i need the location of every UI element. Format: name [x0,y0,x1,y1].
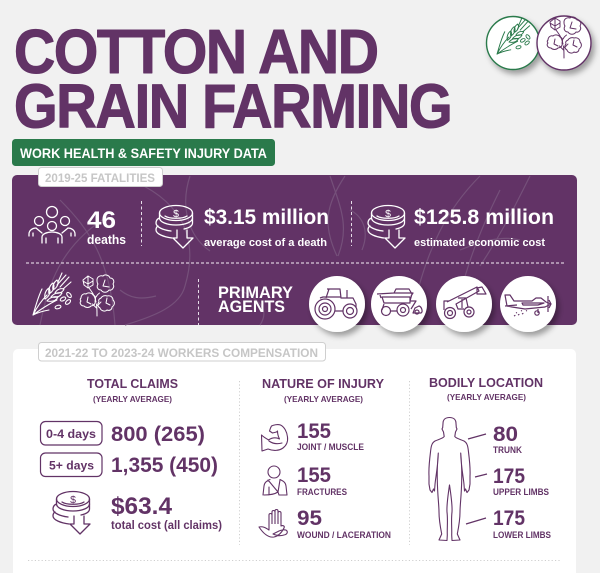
stat: deaths [87,207,126,247]
stat: total cost [111,493,222,532]
badge: 0-4 days: 0-4 days [46,427,96,441]
title: GRAIN FARMING [14,71,451,141]
section tag: 2019-25 FATALITIES [45,173,155,185]
stat: trunk: TRUNK [493,445,522,455]
stat: economic cost: estimated economic cost [414,237,545,249]
icon: person with sling [263,466,287,495]
stat: lower limbs: 175 [493,507,525,530]
badge: 5+ days: 5+ days [49,458,94,472]
icon: coins with down arrow [368,206,405,248]
column: nature of injury [259,377,391,540]
stat: average cost [204,206,329,249]
icon: body outline [429,418,470,540]
stat: lower limbs: LOWER LIMBS [493,530,551,540]
stat: deaths: deaths [87,233,126,247]
icon: telehandler badge [436,276,492,332]
icon: coins with down arrow [53,492,90,534]
stat: fractures: FRACTURES [297,487,347,497]
stat: economic cost: $125.8 million [414,206,554,229]
subtitle banner [12,139,275,166]
subtitle banner: WORK HEALTH & SAFETY INJURY DATA [20,146,267,161]
heading: total claims: TOTAL CLAIMS [87,377,178,391]
heading: nature of injury: NATURE OF INJURY [262,377,385,391]
heading: primary agents: PRIMARY [218,283,294,302]
section tag [38,342,326,361]
decorative plant pattern [40,176,530,325]
icon: wheat badge [486,16,540,70]
panel: fatalities [12,168,577,325]
stat: joint / muscle: JOINT / MUSCLE [297,442,364,452]
stat: fractures [297,464,347,497]
icon: crop duster plane badge [500,276,556,332]
section tag [38,168,162,186]
stat: fractures: 155 [297,464,331,487]
icon: coins with down arrow: $ [173,208,179,220]
column: bodily location [429,376,551,540]
heading: nature of injury: (YEARLY AVERAGE) [284,394,363,404]
stat: total cost: total cost (all claims) [111,520,222,532]
stat: deaths: 46 [87,207,116,234]
icon: wheat [33,273,72,315]
icon: tractor badge [309,276,365,332]
icon: wounded hand [259,510,287,537]
heading: primary agents: AGENTS [218,297,285,316]
heading: total claims [87,377,178,404]
heading: total claims: (YEARLY AVERAGE) [93,394,172,404]
value: 800 (265): 800 (265) [111,423,205,446]
heading: bodily location [429,376,543,402]
stat: upper limbs: UPPER LIMBS [493,487,549,497]
stat: trunk: 80 [493,423,518,446]
badge: 5+ days [40,453,102,476]
stat: economic cost [414,206,554,249]
stat: wound / laceration: 95 [297,507,322,530]
stat: upper limbs: 175 [493,465,525,488]
heading: primary agents [218,283,294,316]
stat: lower limbs [493,507,551,540]
heading: bodily location: BODILY LOCATION [429,376,543,390]
stat: average cost: average cost of a death [204,237,327,249]
stat: trunk [493,423,522,455]
leader lines [466,434,487,524]
icon: cotton [80,275,114,316]
heading: nature of injury [262,377,385,404]
section tag: 2021-22 TO 2023-24 WORKERS COMPENSATION [45,348,318,360]
icon: people [29,206,75,243]
stat: wound / laceration [297,507,391,540]
stat: joint / muscle [297,420,364,452]
icon: coins with down arrow: $ [70,494,76,506]
icon: cotton badge [537,16,591,70]
stat: total cost: $63.4 [111,493,173,520]
value: 1,355 (450): 1,355 (450) [111,454,218,477]
stat: average cost: $3.15 million [204,206,329,229]
icon: combine harvester badge [371,276,427,332]
icon: coins with down arrow: $ [385,208,391,220]
stat: wound / laceration: WOUND / LACERATION [297,530,391,540]
panel: workers compensation [13,342,576,573]
stat: upper limbs [493,465,549,497]
title: COTTON AND [14,17,378,87]
column: total claims [40,377,222,534]
heading: bodily location: (YEARLY AVERAGE) [447,392,526,402]
icon: coins with down arrow [156,206,193,248]
badge: 0-4 days [40,422,102,445]
stat: joint / muscle: 155 [297,420,331,443]
title [14,17,451,141]
icon: flexed arm [262,425,288,451]
